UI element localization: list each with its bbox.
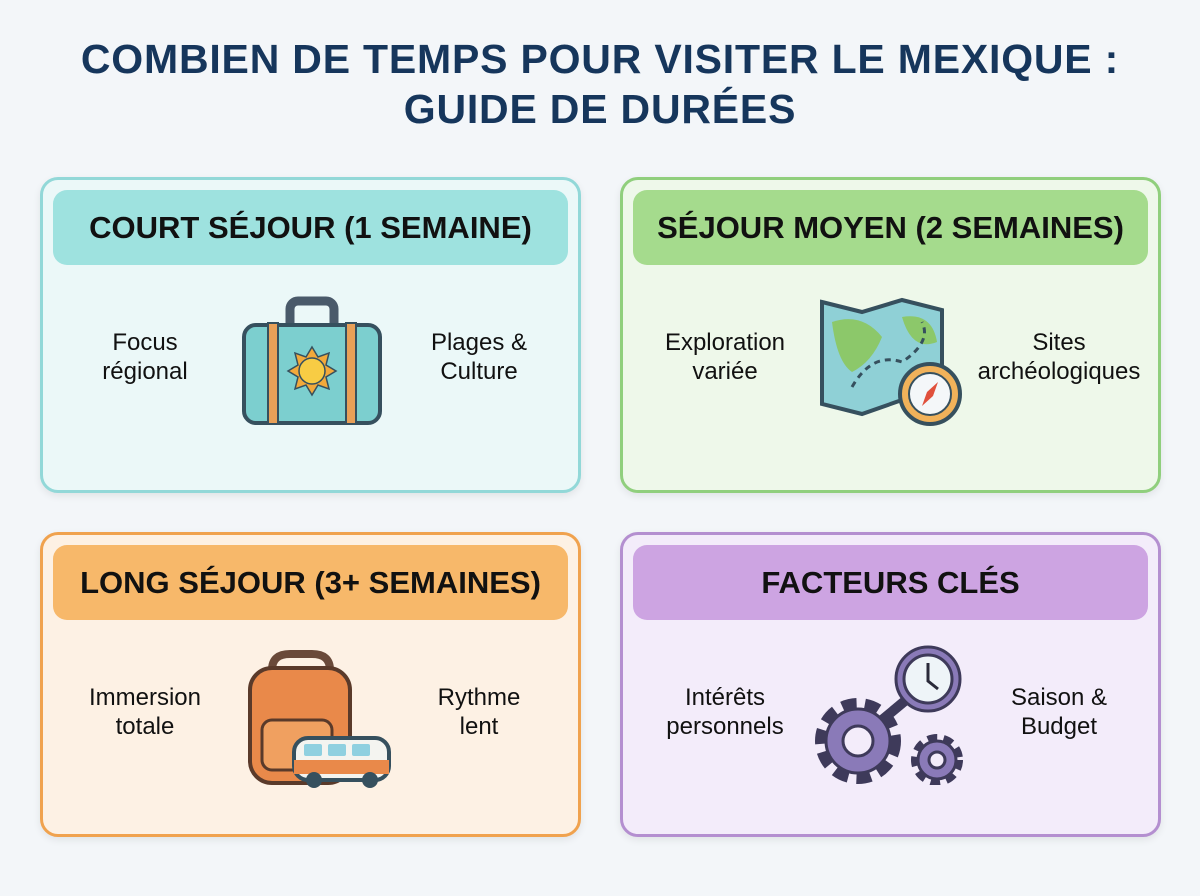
- title: [81, 36, 1119, 132]
- text: exploration variée: Exploration: [665, 329, 785, 356]
- panel: facteurs clés: [620, 532, 1161, 837]
- title: COMBIEN DE TEMPS POUR VISITER LE MEXIQUE :: [81, 36, 1119, 82]
- heading: séjour moyen: [633, 190, 1148, 265]
- text: plages & culture: [431, 329, 527, 385]
- heading: long séjour: LONG SÉJOUR (3+ SEMAINES): [80, 564, 541, 600]
- text: focus régional: [102, 329, 188, 385]
- heading: court séjour: [53, 190, 568, 265]
- text: saison & budget: Budget: [1021, 713, 1097, 740]
- heading: facteurs clés: [633, 545, 1148, 620]
- heading: long séjour: [53, 545, 568, 620]
- heading: séjour moyen: SÉJOUR MOYEN (2 SEMAINES): [657, 210, 1124, 244]
- title: GUIDE DE DURÉES: [404, 86, 796, 132]
- text: intérêts personnels: Intérêts: [685, 684, 765, 711]
- text: focus régional: régional: [102, 358, 188, 385]
- panel: court séjour: [40, 177, 581, 493]
- icon: suitcase: [242, 296, 382, 425]
- text: rythme lent: lent: [460, 713, 498, 740]
- text: intérêts personnels: personnels: [666, 713, 784, 740]
- heading: court séjour: COURT SÉJOUR (1 SEMAINE): [89, 210, 532, 244]
- text: exploration variée: variée: [692, 358, 758, 385]
- text: saison & budget: [1011, 684, 1107, 740]
- text: immersion totale: totale: [116, 713, 174, 740]
- panel: long séjour: [40, 532, 581, 837]
- icon: gears and clock: [815, 646, 963, 785]
- text: plages & culture: Culture: [440, 358, 518, 385]
- text: intérêts personnels: [666, 684, 784, 740]
- text: immersion totale: [89, 684, 201, 740]
- text: sites archéologiques: [978, 329, 1140, 385]
- text: immersion totale: Immersion: [89, 684, 201, 711]
- text: rythme lent: [438, 684, 520, 740]
- panel: séjour moyen: [620, 177, 1161, 493]
- text: plages & culture: Plages &: [431, 329, 527, 356]
- heading: facteurs clés: FACTEURS CLÉS: [761, 564, 1020, 600]
- text: saison & budget: Saison &: [1011, 684, 1107, 711]
- icon: map and compass: [820, 298, 962, 426]
- text: sites archéologiques: archéologiques: [978, 358, 1140, 385]
- icon: backpack and van: [248, 650, 391, 788]
- text: rythme lent: Rythme: [438, 684, 520, 711]
- text: sites archéologiques: Sites: [1032, 329, 1086, 356]
- text: exploration variée: [665, 329, 785, 385]
- text: focus régional: Focus: [112, 329, 178, 356]
